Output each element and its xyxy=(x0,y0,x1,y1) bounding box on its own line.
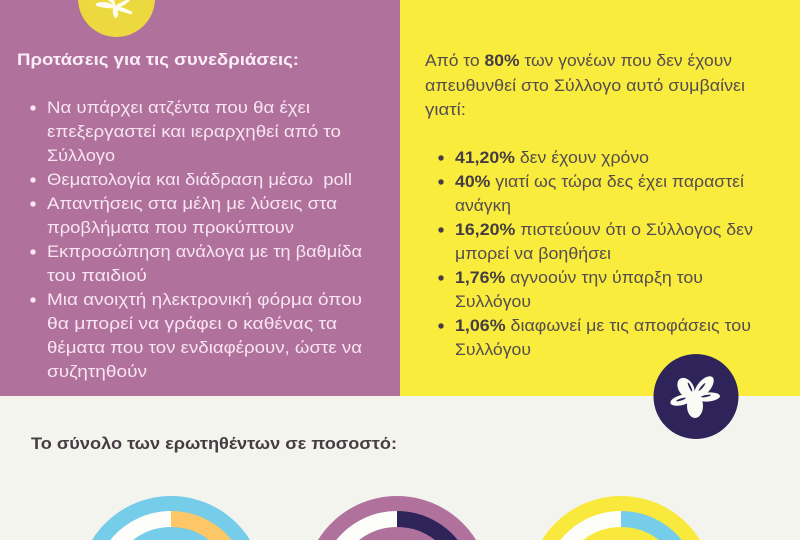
list: meeting proposals: του παιδιού xyxy=(47,266,147,285)
list: reasons: Συλλόγου xyxy=(455,292,531,311)
list: reasons: μπορεί να βοηθήσει xyxy=(455,244,611,263)
list: meeting proposals: θέματα που τον ενδιαφέρουν, ώστε να xyxy=(47,338,362,357)
donut chart: yellow and blue xyxy=(542,496,700,540)
list: reasons: Συλλόγου xyxy=(455,340,531,359)
icon: navy flower badge xyxy=(654,354,738,439)
donut chart: blue and orange xyxy=(92,496,250,540)
list: meeting proposals: Θεματολογία και διάδραση μέσω poll xyxy=(47,170,352,189)
icon: yellow flower badge xyxy=(78,0,155,37)
list: reasons: 41,20% δεν έχουν χρόνο xyxy=(455,148,649,167)
list: meeting proposals: συζητηθούν xyxy=(47,362,147,381)
list: reasons: 1,76% αγνοούν την ύπαρξη του xyxy=(455,268,703,287)
list: meeting proposals xyxy=(30,98,362,381)
list: reasons: 1,06% διαφωνεί με τις αποφάσεις του xyxy=(455,316,751,335)
list: meeting proposals: Να υπάρχει ατζέντα που θα έχει xyxy=(47,98,310,117)
intro text: γιατί: xyxy=(425,100,466,119)
list: reasons: 16,20% πιστεύουν ότι ο Σύλλογος δεν xyxy=(455,220,753,239)
list: meeting proposals: θα μπορεί να γράφει ο καθένας τα xyxy=(47,314,337,333)
intro text: απευθυνθεί στο Σύλλογο αυτό συμβαίνει xyxy=(425,76,745,95)
intro text xyxy=(425,51,745,119)
list: meeting proposals: επεξεργαστεί και ιεραρχηθεί από το xyxy=(47,122,341,141)
list: meeting proposals: Απαντήσεις στα μέλη με λύσεις στα xyxy=(47,194,337,213)
list: reasons xyxy=(438,148,753,359)
heading: meeting proposals: Προτάσεις για τις συνεδριάσεις: xyxy=(17,50,299,69)
intro text: Από το 80% των γονέων που δεν έχουν xyxy=(425,51,732,70)
list: meeting proposals: Εκπροσώπηση ανάλογα με τη βαθμίδα xyxy=(47,242,362,261)
list: reasons: 40% γιατί ως τώρα δες έχει παραστεί xyxy=(455,172,744,191)
heading: total respondents: Το σύνολο των ερωτηθέντων σε ποσοστό: xyxy=(31,434,397,453)
donut chart: purple and navy xyxy=(318,496,476,540)
list: reasons: ανάγκη xyxy=(455,196,511,215)
panel: reasons for not contacting the association xyxy=(400,0,800,396)
panel: meeting proposals xyxy=(0,0,400,396)
list: meeting proposals: Μια ανοιχτή ηλεκτρονική φόρμα όπου xyxy=(47,290,362,309)
list: meeting proposals: προβλήματα που προκύπτουν xyxy=(47,218,294,237)
list: meeting proposals: Σύλλογο xyxy=(47,146,115,165)
